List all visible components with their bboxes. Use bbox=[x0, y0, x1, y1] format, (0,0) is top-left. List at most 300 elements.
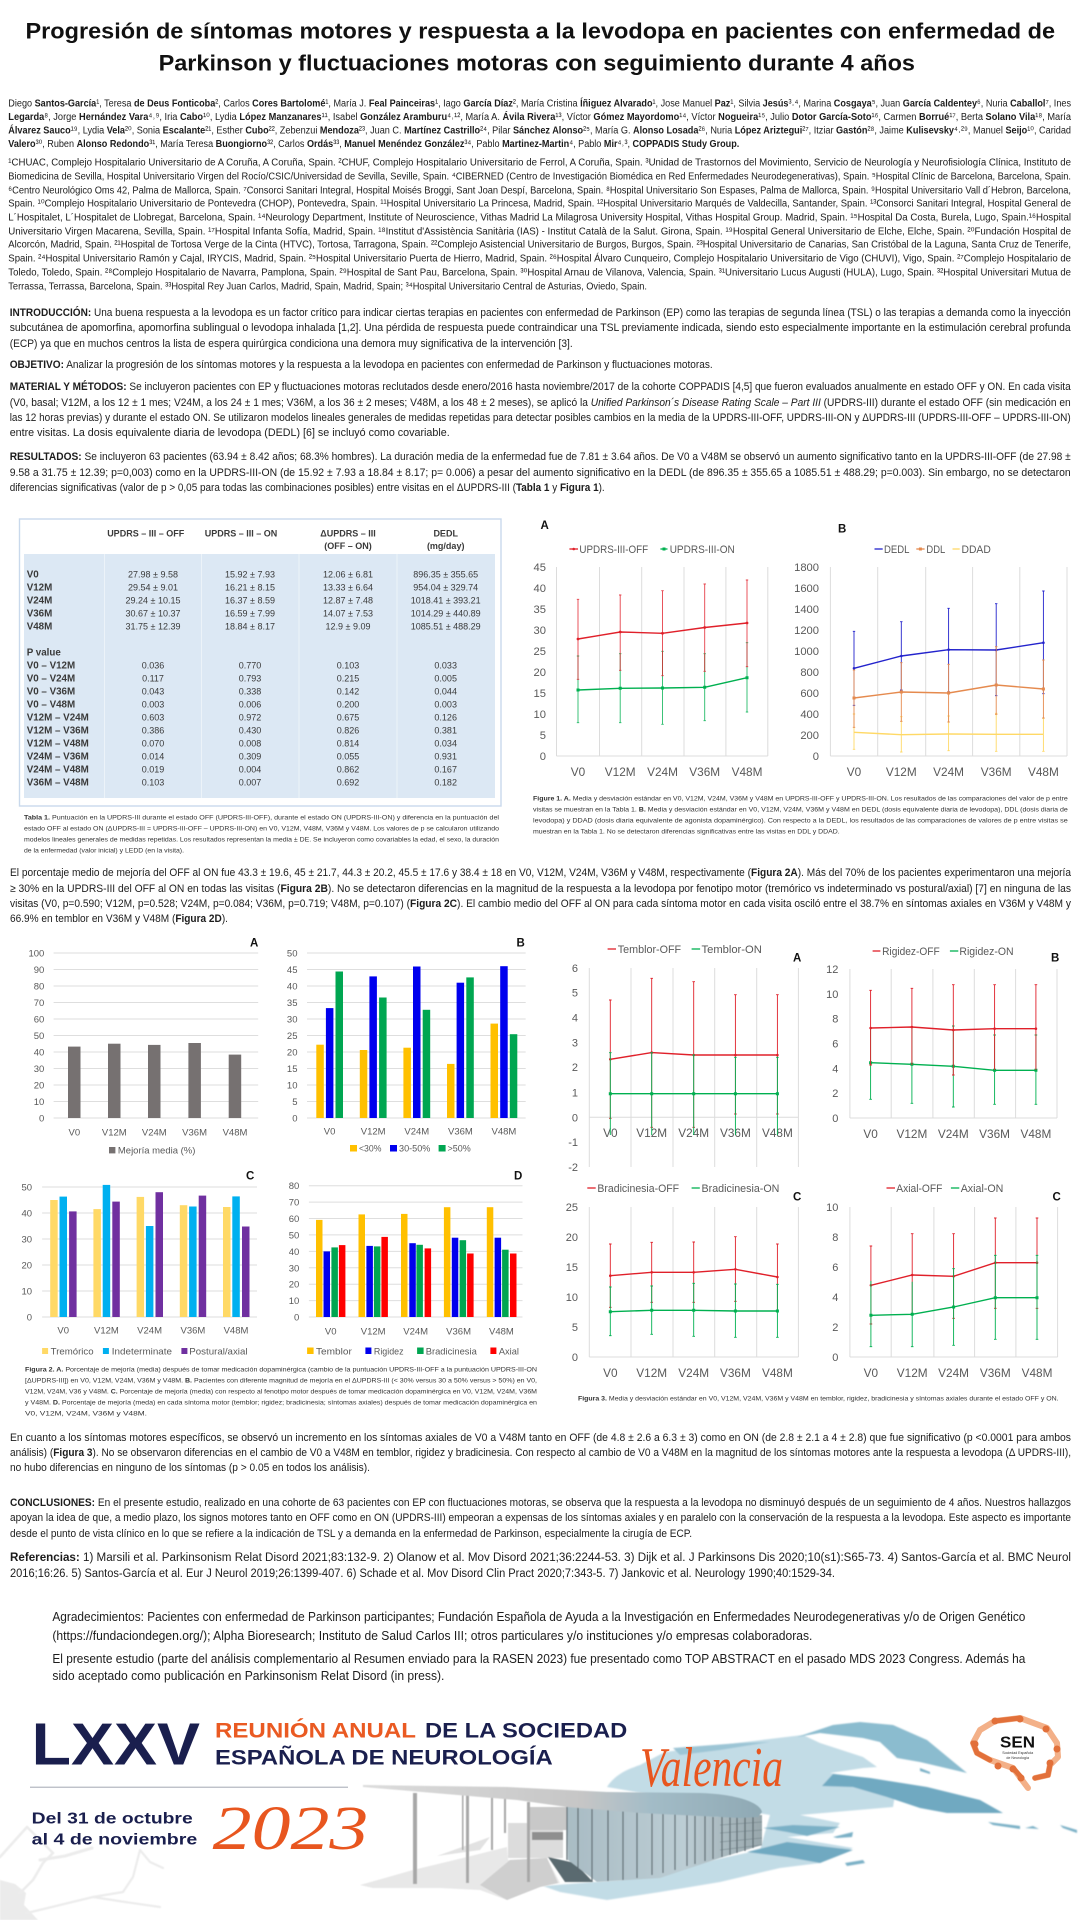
axis labels 1B: 1000 bbox=[794, 646, 819, 658]
axis labels 2A: V36M bbox=[182, 1128, 207, 1138]
bars 2A bbox=[68, 1043, 241, 1118]
legend 2B: 30-50% bbox=[399, 1144, 431, 1154]
legend axial: Axial-OFF bbox=[896, 1183, 943, 1195]
table means rows: 16.21 ± 8.15 bbox=[225, 582, 275, 592]
axis labels 1A: 0 bbox=[540, 751, 546, 763]
title: Progresión de síntomas motores y respuesta a la levodopa en pacientes con enfermedad de bbox=[26, 18, 1055, 44]
axis labels 2D: 50 bbox=[289, 1230, 299, 1241]
axis labels 2A: 10 bbox=[34, 1097, 44, 1108]
table means rows: 954.04 ± 329.74 bbox=[413, 582, 478, 592]
figure 2A: bar chart mean improvement: A bbox=[250, 938, 258, 950]
legend 1A bbox=[569, 544, 735, 556]
axis labels 2D: V48M bbox=[489, 1326, 514, 1338]
axis labels 2A: V12M bbox=[102, 1128, 127, 1138]
table means rows: 29.24 ± 10.15 bbox=[126, 596, 180, 606]
table means rows bbox=[27, 570, 481, 632]
table 1 caption bbox=[24, 814, 499, 854]
axis labels bradicinesia: V0 bbox=[603, 1366, 618, 1380]
axis labels 1A: 5 bbox=[540, 730, 546, 742]
table p values: 0.972 bbox=[239, 712, 261, 722]
affiliations: L´Hospitalet, L´Hospitalet de Llobregat, Barcelona, Spain. ¹⁴Neurology Department, Institute of Neuroscience, Vithas Madrid La Milagrosa University Hospital, Vithas Hospital Group. Madrid, Spain. ¹⁵Hospital Da Costa, Burela, Lugo, Spain.¹⁶Hospital bbox=[8, 212, 1071, 224]
axis labels 1A bbox=[534, 562, 762, 779]
axis labels temblor: 4 bbox=[572, 1012, 578, 1024]
axis labels 2C: 50 bbox=[22, 1182, 32, 1194]
legend 1A: UPDRS-III-ON bbox=[670, 544, 735, 556]
series temblor-ON bbox=[609, 1053, 779, 1135]
series axial-OFF bbox=[870, 1218, 1038, 1324]
figure 1 caption bbox=[533, 796, 1068, 836]
figure 2D: bar chart by motor symptom: D bbox=[514, 1170, 522, 1182]
table means rows: 1085.51 ± 488.29 bbox=[411, 622, 481, 632]
axis labels 1B: V36M bbox=[981, 765, 1012, 779]
legend rigidez bbox=[873, 946, 1014, 958]
legend bradicinesia bbox=[587, 1183, 779, 1195]
axis labels 2B: V12M bbox=[361, 1126, 386, 1138]
axis labels 2D: V24M bbox=[403, 1326, 428, 1338]
axis labels 2C: V48M bbox=[224, 1326, 248, 1336]
table means rows: 14.07 ± 7.53 bbox=[323, 608, 373, 618]
figure 2C: bar chart by motor phenotype bbox=[22, 1170, 257, 1358]
table means rows: 1018.41 ± 393.21 bbox=[411, 596, 481, 606]
legend 1A: UPDRS-III-OFF bbox=[579, 544, 648, 556]
axis labels bradicinesia bbox=[566, 1202, 793, 1380]
legend 2D: Rigidez bbox=[374, 1346, 404, 1358]
axis labels rigidez: V0 bbox=[863, 1127, 878, 1141]
axis labels 2B: 30 bbox=[287, 1014, 298, 1026]
axis labels rigidez: 10 bbox=[826, 989, 838, 1001]
axis labels axial: 8 bbox=[832, 1232, 838, 1244]
axis labels 1B: 600 bbox=[800, 688, 819, 700]
table p values: 0.103 bbox=[142, 778, 164, 788]
axis labels 1B: V24M bbox=[933, 765, 964, 779]
table header: (OFF – ON) bbox=[324, 541, 372, 551]
table means rows: 12.06 ± 6.81 bbox=[323, 570, 373, 580]
table means rows: 30.67 ± 10.37 bbox=[126, 608, 180, 618]
table means rows: 12.87 ± 7.48 bbox=[323, 596, 373, 606]
table p values: 0.430 bbox=[239, 726, 261, 736]
axis labels 2D: V36M bbox=[446, 1326, 471, 1338]
figure 2 caption: V0, V12M, V24M, V36M y V48M. bbox=[25, 1410, 147, 1418]
axis labels 2A: 90 bbox=[34, 965, 44, 976]
axis labels 2B: 50 bbox=[287, 948, 298, 960]
axis labels 2A: 80 bbox=[34, 982, 44, 992]
legend 2C: Indeterminate bbox=[112, 1346, 172, 1358]
axis labels temblor: V48M bbox=[762, 1126, 793, 1140]
legend bradicinesia: Bradicinesia-ON bbox=[702, 1183, 779, 1195]
table header: (mg/day) bbox=[427, 541, 464, 551]
table means rows: 15.92 ± 7.93 bbox=[225, 570, 275, 580]
axis labels rigidez: 0 bbox=[832, 1113, 838, 1125]
figure 2 caption: [ΔUPDRS-III]) en V0, V12M, V24M, V36M y V48M. B. Pacientes con diferente magnitud de mejoría en el ΔUPDRS-III (< 30% versus 30 a 50% versus > 50%) en V0, bbox=[25, 1378, 537, 1384]
legend 1B: DDL bbox=[926, 544, 945, 556]
axis labels 2A: V0 bbox=[68, 1128, 80, 1138]
axis labels 2B: 20 bbox=[287, 1048, 298, 1058]
bars bradicinesia bbox=[331, 1240, 509, 1317]
figure 2B: bar chart improvement magnitude bbox=[287, 938, 526, 1154]
axis labels 2B bbox=[287, 948, 516, 1138]
axis labels 2D: 80 bbox=[289, 1181, 299, 1192]
table p values: 0.603 bbox=[142, 712, 164, 722]
table p values: V0 – V24M bbox=[27, 674, 75, 684]
axis labels 2C: V0 bbox=[57, 1326, 69, 1336]
table means rows: V12M bbox=[27, 582, 52, 594]
axis labels 2B: 40 bbox=[287, 982, 298, 992]
axis labels 2B: V36M bbox=[448, 1126, 473, 1138]
banner: congress header bbox=[0, 1710, 1077, 1920]
table p values: V0 – V48M bbox=[27, 700, 75, 710]
axis labels 2A: 100 bbox=[28, 948, 44, 960]
title bbox=[26, 18, 1055, 76]
axis labels 1B bbox=[794, 562, 1059, 779]
table p values: 0.043 bbox=[142, 686, 164, 696]
axis labels bradicinesia: 0 bbox=[572, 1352, 578, 1364]
axis labels 2D: 0 bbox=[294, 1312, 299, 1324]
axis labels 1A: V12M bbox=[605, 765, 636, 779]
legend 2D bbox=[307, 1346, 519, 1358]
table header: ΔUPDRS – III bbox=[320, 528, 376, 538]
table p values: 0.770 bbox=[239, 660, 261, 670]
table means rows: 18.84 ± 8.17 bbox=[225, 622, 275, 632]
axis labels 1A: V0 bbox=[571, 765, 586, 779]
figure 2D: bar chart by motor symptom bbox=[289, 1170, 522, 1358]
results text bbox=[10, 451, 1071, 494]
table p values: 0.675 bbox=[337, 712, 359, 722]
figure 3A: line chart temblor: A bbox=[793, 952, 801, 964]
axis labels 2A: V24M bbox=[142, 1128, 167, 1138]
axis labels 2D bbox=[289, 1181, 514, 1338]
axis labels bradicinesia: 25 bbox=[566, 1202, 578, 1214]
paragraph: levodopa response bbox=[10, 867, 1072, 925]
acknowledgements: El presente estudio (parte del análisis complementario al Resumen enviado para la RASEN 2023) fue presentado como TOP ABSTRACT en el pasado MDS 2023 Congress. Además ha bbox=[52, 1652, 1025, 1666]
legend rigidez: Rigidez-ON bbox=[959, 946, 1014, 958]
axis labels bradicinesia: V24M bbox=[678, 1366, 709, 1380]
legend 2D: Axial bbox=[499, 1346, 519, 1358]
axis labels rigidez: V24M bbox=[938, 1127, 969, 1141]
axis labels 2C: 40 bbox=[22, 1208, 32, 1220]
axis labels 2B: 0 bbox=[292, 1114, 298, 1124]
table means rows: 896.35 ± 355.65 bbox=[413, 570, 478, 580]
table p values: 0.036 bbox=[142, 660, 164, 670]
axis labels bradicinesia: 5 bbox=[572, 1322, 578, 1334]
series UPDRS-III-ON bbox=[577, 643, 748, 724]
axis labels 1B: 1200 bbox=[794, 625, 819, 637]
axis labels bradicinesia: 15 bbox=[566, 1262, 578, 1274]
acknowledgements: Agradecimientos: Pacientes con enfermedad de Parkinson participantes; Fundación Española de Ayuda a la Investigación en Enfermedades Neurodegenerativas y/o de Origen Genético bbox=[52, 1610, 1025, 1624]
methods text: (V0, basal; V12M, a los 12 ± 1 mes; V24M, a los 24 ± 1 mes; V36M, a los 36 ± 2 meses; V48M, a los 48 ± 2 meses), se aplicó la Unified Parkinson´s Disease Rating Scale – Part III (UPDRS-III) durante el estado OFF (sin medicación en bbox=[10, 397, 1071, 409]
legend 2C: Tremórico bbox=[51, 1346, 94, 1358]
table means rows: 16.37 ± 8.59 bbox=[225, 596, 275, 606]
axis labels 2C: V36M bbox=[180, 1326, 205, 1336]
paragraph: levodopa response: 66.9% en temblor en V36M y V48M (Figura 2D). bbox=[10, 913, 228, 925]
axis labels temblor bbox=[568, 963, 793, 1174]
event name: REUNIÓN ANUAL bbox=[215, 1717, 416, 1742]
axis labels 2B: V24M bbox=[404, 1126, 429, 1138]
axis labels 1A: 45 bbox=[534, 562, 546, 574]
methods text bbox=[10, 380, 1072, 439]
watercolour wash bbox=[543, 1722, 1077, 1900]
axis labels 2C: 20 bbox=[22, 1260, 32, 1272]
series rigidez-ON bbox=[869, 1026, 1037, 1107]
axis labels 2A: 30 bbox=[34, 1064, 44, 1075]
bars axial bbox=[339, 1237, 516, 1317]
introduction text bbox=[10, 306, 1072, 350]
axis labels axial: 10 bbox=[826, 1202, 838, 1214]
figure 3C: line chart bradicinesia bbox=[566, 1183, 801, 1380]
table p values: V24M – V48M bbox=[27, 764, 89, 776]
city name: Valencia bbox=[640, 1737, 783, 1799]
acknowledgements bbox=[52, 1610, 1025, 1683]
axis labels 2B: 35 bbox=[287, 998, 298, 1009]
table p values: V0 – V36M bbox=[27, 686, 75, 698]
table p values: 0.007 bbox=[239, 778, 261, 788]
axis labels 2A: 50 bbox=[34, 1031, 44, 1042]
axis labels 2A: V48M bbox=[223, 1128, 247, 1138]
table means rows: 31.75 ± 12.39 bbox=[126, 622, 180, 632]
axis labels rigidez: 12 bbox=[826, 964, 838, 976]
axis labels rigidez bbox=[826, 964, 1051, 1141]
axis labels axial: V36M bbox=[980, 1366, 1011, 1380]
table 1 caption: estado OFF al estado ON (ΔUPDRS-III = UPDRS-III-OFF – UPDRS-III-ON) en V0, V12M, V48M, V36M y V48M. Los valores de p se calcularon utilizando bbox=[24, 826, 499, 832]
table means rows: V48M bbox=[27, 622, 52, 632]
legend 2A: Mejoría media (%) bbox=[118, 1146, 195, 1156]
axis labels 1B: V0 bbox=[847, 765, 862, 779]
axis labels 1A: V24M bbox=[647, 765, 678, 779]
legend 2C bbox=[42, 1346, 247, 1358]
axis labels axial: V24M bbox=[938, 1366, 969, 1380]
table p values: 0.003 bbox=[434, 700, 457, 710]
legend 2B: <30% bbox=[359, 1144, 382, 1154]
table means rows: 16.59 ± 7.99 bbox=[225, 608, 275, 618]
axis labels 2D: V12M bbox=[361, 1326, 386, 1338]
table 1 bbox=[20, 519, 501, 806]
axis labels temblor: 0 bbox=[572, 1112, 578, 1124]
event name: DE LA SOCIEDAD bbox=[425, 1718, 627, 1742]
table p values: 0.182 bbox=[434, 778, 457, 788]
conclusions text: desde el punto de vista clínico en lo que se refiere a la indicación de TSL y a demanda en la enfermedad de Parkinson, especialmente la cirugía de ECP. bbox=[10, 1528, 692, 1540]
table p values: 0.862 bbox=[337, 764, 359, 774]
figure 3 caption: Figura 3. Media y desviación estándar en V0, V12M, V24M, V36M y V48M en temblor, rigidez, bradicinesia y síntomas axiales durante el estado OFF y ON. bbox=[578, 1396, 1059, 1402]
figure 2 caption: Figura 2. A. Porcentaje de mejoría (media) después de tomar medicación dopaminérgica (cambio de la puntuación UPDRS-III-OFF a la puntuación UPDRS-III-ON bbox=[25, 1366, 537, 1374]
axis labels bradicinesia: V48M bbox=[762, 1366, 793, 1380]
table p values: V0 – V12M bbox=[27, 660, 75, 672]
axis labels axial bbox=[826, 1202, 1052, 1380]
table means rows: V0 bbox=[27, 570, 39, 580]
axis labels rigidez: V36M bbox=[979, 1127, 1010, 1141]
methods text: entre visitas. La dosis equivalente diaria de levodopa (DEDL) [6] se incluyó como covariable. bbox=[10, 427, 450, 439]
axis labels bradicinesia: V36M bbox=[720, 1366, 751, 1380]
axis labels 1A: 40 bbox=[534, 583, 546, 595]
axis labels axial: 0 bbox=[832, 1352, 838, 1364]
axis labels 2C: V24M bbox=[137, 1326, 162, 1336]
SEN logo: SEN bbox=[1000, 1734, 1035, 1751]
objective text: OBJETIVO: Analizar la progresión de los síntomas motores y la respuesta a la levodopa en pacientes con enfermedad de Parkinson y fluctuaciones motoras. bbox=[10, 359, 713, 371]
table means rows: 12.9 ± 9.09 bbox=[326, 622, 370, 632]
SEN logo bbox=[973, 1718, 1058, 1788]
axis labels 1B: 1600 bbox=[794, 583, 819, 595]
legend 1B: DEDL bbox=[884, 544, 910, 556]
legend 2C: Postural/axial bbox=[189, 1346, 248, 1358]
axis labels 1B: 1400 bbox=[794, 604, 819, 616]
axis labels temblor: V12M bbox=[636, 1126, 667, 1140]
table p values: 0.200 bbox=[337, 700, 359, 710]
figure 3A: line chart temblor bbox=[568, 944, 801, 1174]
axis labels 2A: 70 bbox=[34, 998, 44, 1009]
table means rows: V36M bbox=[27, 608, 52, 620]
axis labels temblor: V0 bbox=[603, 1126, 618, 1140]
table p values: 0.034 bbox=[434, 738, 457, 748]
authors: Valero³⁰, Ruben Alonso Redondo³¹, María Teresa Buongiorno³², Carlos Ordás³³, Manuel Menéndez González³⁴, Pablo Martinez-Martin⁴, Pablo Mir⁴˒³, COPPADIS Study Group. bbox=[8, 139, 739, 150]
figure 3D: line chart axial: C bbox=[1052, 1192, 1061, 1204]
table p values: 0.142 bbox=[337, 686, 359, 696]
authors: Álvarez Sauco¹⁹, Lydia Vela²⁰, Sonia Escalante²¹, Esther Cubo²², Zebenzui Mendoza²³, Juan C. Martínez Castrillo²⁴, Pilar Sánchez Alonso²⁵, María G. Alonso Losada²⁶, Nuria López Ariztegui²⁷, Itziar Gastón²⁸, Jaime Kulisevsky⁴˒²⁹, Manuel Seijo¹⁰, Caridad bbox=[8, 124, 1071, 136]
figure 3B: line chart rigidez: B bbox=[1051, 952, 1059, 964]
axis labels temblor: -2 bbox=[568, 1162, 578, 1174]
axis labels temblor: 5 bbox=[572, 988, 578, 1000]
axis labels 2C: 0 bbox=[27, 1312, 32, 1324]
table p values: 0.117 bbox=[142, 674, 164, 684]
legend axial bbox=[886, 1183, 1003, 1195]
axis labels temblor: V24M bbox=[678, 1126, 709, 1140]
legend temblor bbox=[608, 944, 762, 956]
series bradicinesia-ON bbox=[609, 1283, 779, 1337]
legend 2D: Bradicinesia bbox=[426, 1346, 478, 1358]
axis labels 1A: V36M bbox=[689, 765, 720, 779]
affiliations: ¹CHUAC, Complejo Hospitalario Universitario de A Coruña, A Coruña, Spain. ²CHUF, Complejo Hospitalario Universitario de Ferrol, A Coruña, Spain. ³Unidad de Trastornos del Movimiento, Servicio de Neurología y Neurofisiología Clínica, Instituto de bbox=[8, 158, 1071, 168]
axis labels 2D: 40 bbox=[289, 1247, 299, 1258]
axis labels axial: 4 bbox=[832, 1292, 838, 1304]
figure 3C: line chart bradicinesia: C bbox=[793, 1192, 801, 1204]
table p values: 0.692 bbox=[337, 778, 359, 788]
axis labels 2A: 60 bbox=[34, 1014, 44, 1026]
authors: Diego Santos-García¹, Teresa de Deus Fonticoba², Carlos Cores Bartolomé¹, María J. Feal Painceiras¹, Iago García Díaz², María Cristina Íñiguez Alvarado¹, Jose Manuel Paz¹, Silvia Jesús³˒⁴, Marina Cosgaya⁵, Juan García Caldentey⁶, Nuria Caballol⁷, Ines bbox=[8, 96, 1071, 110]
axis labels bradicinesia: 10 bbox=[566, 1292, 578, 1304]
table p values: 0.309 bbox=[239, 752, 261, 762]
table p values: V12M – V48M bbox=[27, 738, 89, 750]
table p values: 0.381 bbox=[434, 726, 457, 736]
table p values: 0.338 bbox=[239, 686, 261, 696]
axis labels temblor: V36M bbox=[720, 1126, 751, 1140]
axis labels axial: V12M bbox=[897, 1366, 928, 1380]
affiliations bbox=[8, 158, 1071, 292]
results text: diferencias significativas (valor de p > 0,05 para todas las combinaciones posibles) entre visitas en el ΔUPDRS-III (Tabla 1 y Figura 1). bbox=[10, 482, 605, 494]
axis labels bradicinesia: 20 bbox=[566, 1232, 578, 1244]
table p values: 0.006 bbox=[239, 700, 261, 710]
table p values: 0.931 bbox=[434, 752, 457, 762]
bars 30-50 percent bbox=[326, 966, 508, 1118]
series DEDL bbox=[853, 591, 1045, 705]
table p values: 0.033 bbox=[434, 660, 457, 670]
bars under 30 percent bbox=[316, 1024, 498, 1118]
axis labels 1A: 30 bbox=[534, 625, 546, 637]
table 1 caption: Tabla 1. Puntuación en la UPDRS-III durante el estado OFF (UPDRS-III-OFF), durante el estado ON (UPDRS-III-ON) y diferencia en la puntuación del bbox=[24, 814, 499, 822]
axis labels 2A: 0 bbox=[39, 1114, 44, 1124]
table p values: 0.005 bbox=[434, 674, 457, 684]
table means rows: 29.54 ± 9.01 bbox=[128, 582, 178, 592]
table means rows: V24M bbox=[27, 596, 52, 606]
axis labels temblor: 2 bbox=[572, 1062, 578, 1074]
table p values: 0.004 bbox=[239, 764, 261, 774]
axis labels rigidez: 4 bbox=[832, 1063, 838, 1075]
axis labels 1B: V48M bbox=[1028, 765, 1059, 779]
axis labels 1A: 10 bbox=[534, 709, 546, 721]
series DDAD bbox=[853, 713, 1045, 752]
figure 3B: line chart rigidez bbox=[826, 946, 1059, 1141]
table header bbox=[107, 528, 464, 551]
axis labels rigidez: V12M bbox=[896, 1127, 927, 1141]
axis labels 2B: V48M bbox=[491, 1126, 516, 1138]
table p values: 0.055 bbox=[337, 752, 359, 762]
bars over 50 percent bbox=[336, 972, 517, 1118]
axis labels 2C: 10 bbox=[22, 1286, 32, 1298]
series UPDRS-III-OFF bbox=[577, 580, 748, 679]
table header: DEDL bbox=[433, 528, 458, 538]
legend 2B bbox=[350, 1144, 471, 1154]
axis labels 2B: V0 bbox=[324, 1126, 335, 1138]
axis labels 2B: 5 bbox=[292, 1097, 298, 1108]
title: Parkinson y fluctuaciones motoras con seguimiento durante 4 años bbox=[159, 50, 915, 76]
paragraph: specific motor symptoms: no hubo diferencias en ninguno de los síntomas (p > 0.05 en todos los análisis). bbox=[10, 1462, 370, 1474]
axis labels 2D: 70 bbox=[289, 1198, 299, 1209]
figure 2 caption: V12M, V24M, V36 y V48M. C. Porcentaje de mejoría (media) con respecto al fenotipo motor después de tomar medicación dopaminérgica en V0, V12M, V24M, V36M bbox=[25, 1388, 537, 1396]
figure 2B: bar chart improvement magnitude: B bbox=[516, 938, 525, 950]
axis labels 1B: 800 bbox=[800, 667, 819, 679]
event dates: Del 31 de octubre bbox=[32, 1810, 193, 1827]
series DDL bbox=[853, 647, 1045, 727]
table p values: 0.826 bbox=[337, 726, 359, 736]
axis labels 1A: 25 bbox=[534, 646, 546, 658]
authors bbox=[8, 96, 1071, 150]
series rigidez-OFF bbox=[869, 985, 1037, 1075]
table header: UPDRS – III – ON bbox=[205, 528, 277, 538]
table p values: V12M – V24M bbox=[27, 712, 89, 724]
axis labels 2B: 10 bbox=[287, 1080, 298, 1092]
axis labels 1B: 1800 bbox=[794, 562, 819, 574]
axis labels 2A: 20 bbox=[34, 1080, 44, 1092]
axis labels 2D: V0 bbox=[325, 1326, 337, 1338]
table p values: P value bbox=[27, 648, 61, 658]
table means rows: 1014.29 ± 440.89 bbox=[411, 608, 481, 618]
axis labels temblor: 1 bbox=[572, 1087, 578, 1099]
figure 1 caption: levodopa) y DDAD (dosis diaria equivalente de agonista dopaminérgico). Con respecto a la DEDL, los resultados de las comparaciones de valores de p entre visitas se bbox=[533, 818, 1068, 824]
axis labels temblor: -1 bbox=[568, 1137, 578, 1149]
table p values: 0.044 bbox=[434, 686, 457, 696]
axis labels rigidez: 2 bbox=[832, 1088, 838, 1100]
axis labels rigidez: 8 bbox=[832, 1014, 838, 1026]
table p values: 0.814 bbox=[337, 738, 359, 748]
table p values: 0.014 bbox=[142, 752, 164, 762]
axis labels 1A: 20 bbox=[534, 667, 546, 679]
figure 1A: line chart UPDRS-III: A bbox=[540, 520, 549, 532]
legend rigidez: Rigidez-OFF bbox=[882, 946, 940, 958]
axis labels 2A bbox=[28, 948, 247, 1138]
table p values bbox=[27, 648, 457, 788]
legend 1B bbox=[874, 544, 991, 556]
building illustration bbox=[360, 1785, 762, 1900]
table p values: 0.103 bbox=[337, 660, 359, 670]
table p values: 0.386 bbox=[142, 726, 164, 736]
axis labels 2C: 30 bbox=[22, 1234, 32, 1246]
axis labels rigidez: V48M bbox=[1020, 1127, 1051, 1141]
event dates: al 4 de noviembre bbox=[32, 1831, 197, 1848]
year: 2023 bbox=[213, 1795, 368, 1863]
bars tremorico bbox=[50, 1197, 231, 1317]
figure 1 caption: muestran en la Tabla 1. No se detectaron diferencias significativas entre las visitas en DDL y DDAD. bbox=[533, 828, 840, 836]
figure 1A: line chart UPDRS-III bbox=[534, 520, 768, 779]
table means rows: 27.98 ± 9.58 bbox=[128, 570, 178, 580]
series temblor-OFF bbox=[609, 978, 779, 1127]
figure 3D: line chart axial bbox=[826, 1183, 1061, 1380]
axis labels 2D: 30 bbox=[289, 1263, 299, 1274]
